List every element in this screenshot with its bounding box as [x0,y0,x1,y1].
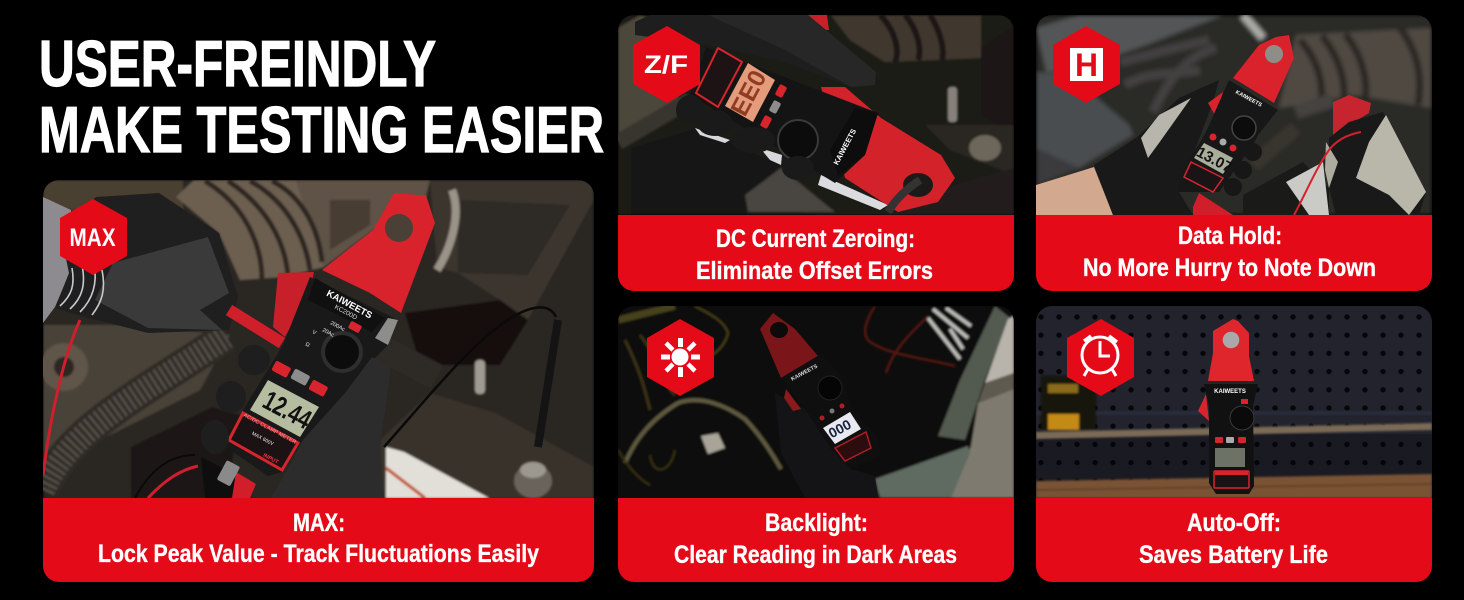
meter body [1179,80,1278,215]
meter body: 13.07 [1194,144,1235,176]
meter body: KAIWEETS [832,127,858,166]
caption: auto-off: Saves Battery Life [1139,541,1328,569]
photo: dark workshop [618,306,1014,498]
meter body [781,356,872,462]
caption: backlight: Clear Reading in Dark Areas [674,541,957,569]
caption: backlight: Backlight: [765,509,868,537]
meter body [690,47,878,183]
meter body [1204,384,1258,494]
battery label and wire [1243,95,1371,215]
panel: backlight [618,306,1014,582]
icon: hold hexagon: H [1075,47,1098,83]
title: MAKE TESTING EASIER [39,93,604,166]
photo: meter held in engine bay [40,180,594,500]
hand in shadow [775,393,878,498]
right glove [1294,112,1426,215]
clamp meter body: Ω [304,341,311,349]
meter body: 000 [826,416,854,441]
clamp meter body: KAIWEETS [324,288,374,321]
panel: auto-off [1036,306,1432,582]
caption: data hold [1036,215,1432,291]
panel: data hold [1036,15,1432,291]
clamp meter body: 12.44 [258,385,316,435]
clamp meter body: KC200D [333,304,358,322]
title: USER-FREINDLY [39,27,436,100]
red clamp jaw [273,193,435,337]
icon: MAX hexagon: MAX [70,224,116,252]
meter body: KAIWEETS [1234,90,1263,109]
clamp meter body: V [311,329,317,337]
meter body: EE0 [725,66,772,121]
photo: meter zeroing [618,15,1014,215]
left gloved hand [43,193,282,343]
clamp meter body: 200Ac [329,320,346,333]
caption: data hold: No More Hurry to Note Down [1083,254,1376,282]
white labels [695,128,888,210]
caption: auto-off: Auto-Off: [1187,509,1281,537]
meter body: KAIWEETS [1214,389,1246,395]
caption: MAX: Lock Peak Value - Track Fluctuations Easily [98,540,539,568]
clamp meter body: 20Ac [321,327,335,339]
panel: DC current zeroing [618,15,1014,291]
panel: MAX [40,180,594,582]
red clamp [821,87,955,212]
caption: MAX: MAX: [293,509,345,537]
icon: Z/F hexagon [633,26,700,103]
caption: DC current zeroing: Eliminate Offset Errors [696,257,933,285]
clamp meter body: AC/DC CLAMP METER [242,413,297,446]
red clamp [1198,319,1254,421]
hand [635,15,876,180]
icon: MAX hexagon [60,199,127,275]
left glove and arm [1036,80,1219,215]
clamp meter body: INPUT [262,453,280,466]
caption: auto-off [1036,498,1432,582]
caption: MAX [43,498,594,582]
photo: meter on workbench [1036,306,1432,498]
icon: Z/F hexagon: Z/F [644,51,688,79]
clamp meter body [226,277,398,476]
icon: sun hexagon [647,319,714,396]
caption: backlight [618,498,1014,582]
icon: hold hexagon [1053,26,1120,103]
caption: DC current zeroing: DC Current Zeroing: [716,225,915,253]
gripping fingers and front glove [201,345,391,498]
caption: DC current zeroing [618,215,1014,291]
title [39,27,604,166]
red clamp [760,313,818,411]
cable and probe [43,307,558,498]
icon: alarm clock hexagon [1067,319,1134,396]
caption: data hold: Data Hold: [1178,222,1282,250]
photo: meter in hands [1036,15,1432,215]
meter body: KAIWEETS [790,363,819,383]
red clamp [1208,35,1294,117]
clamp meter body: MAX 600V [251,431,275,448]
